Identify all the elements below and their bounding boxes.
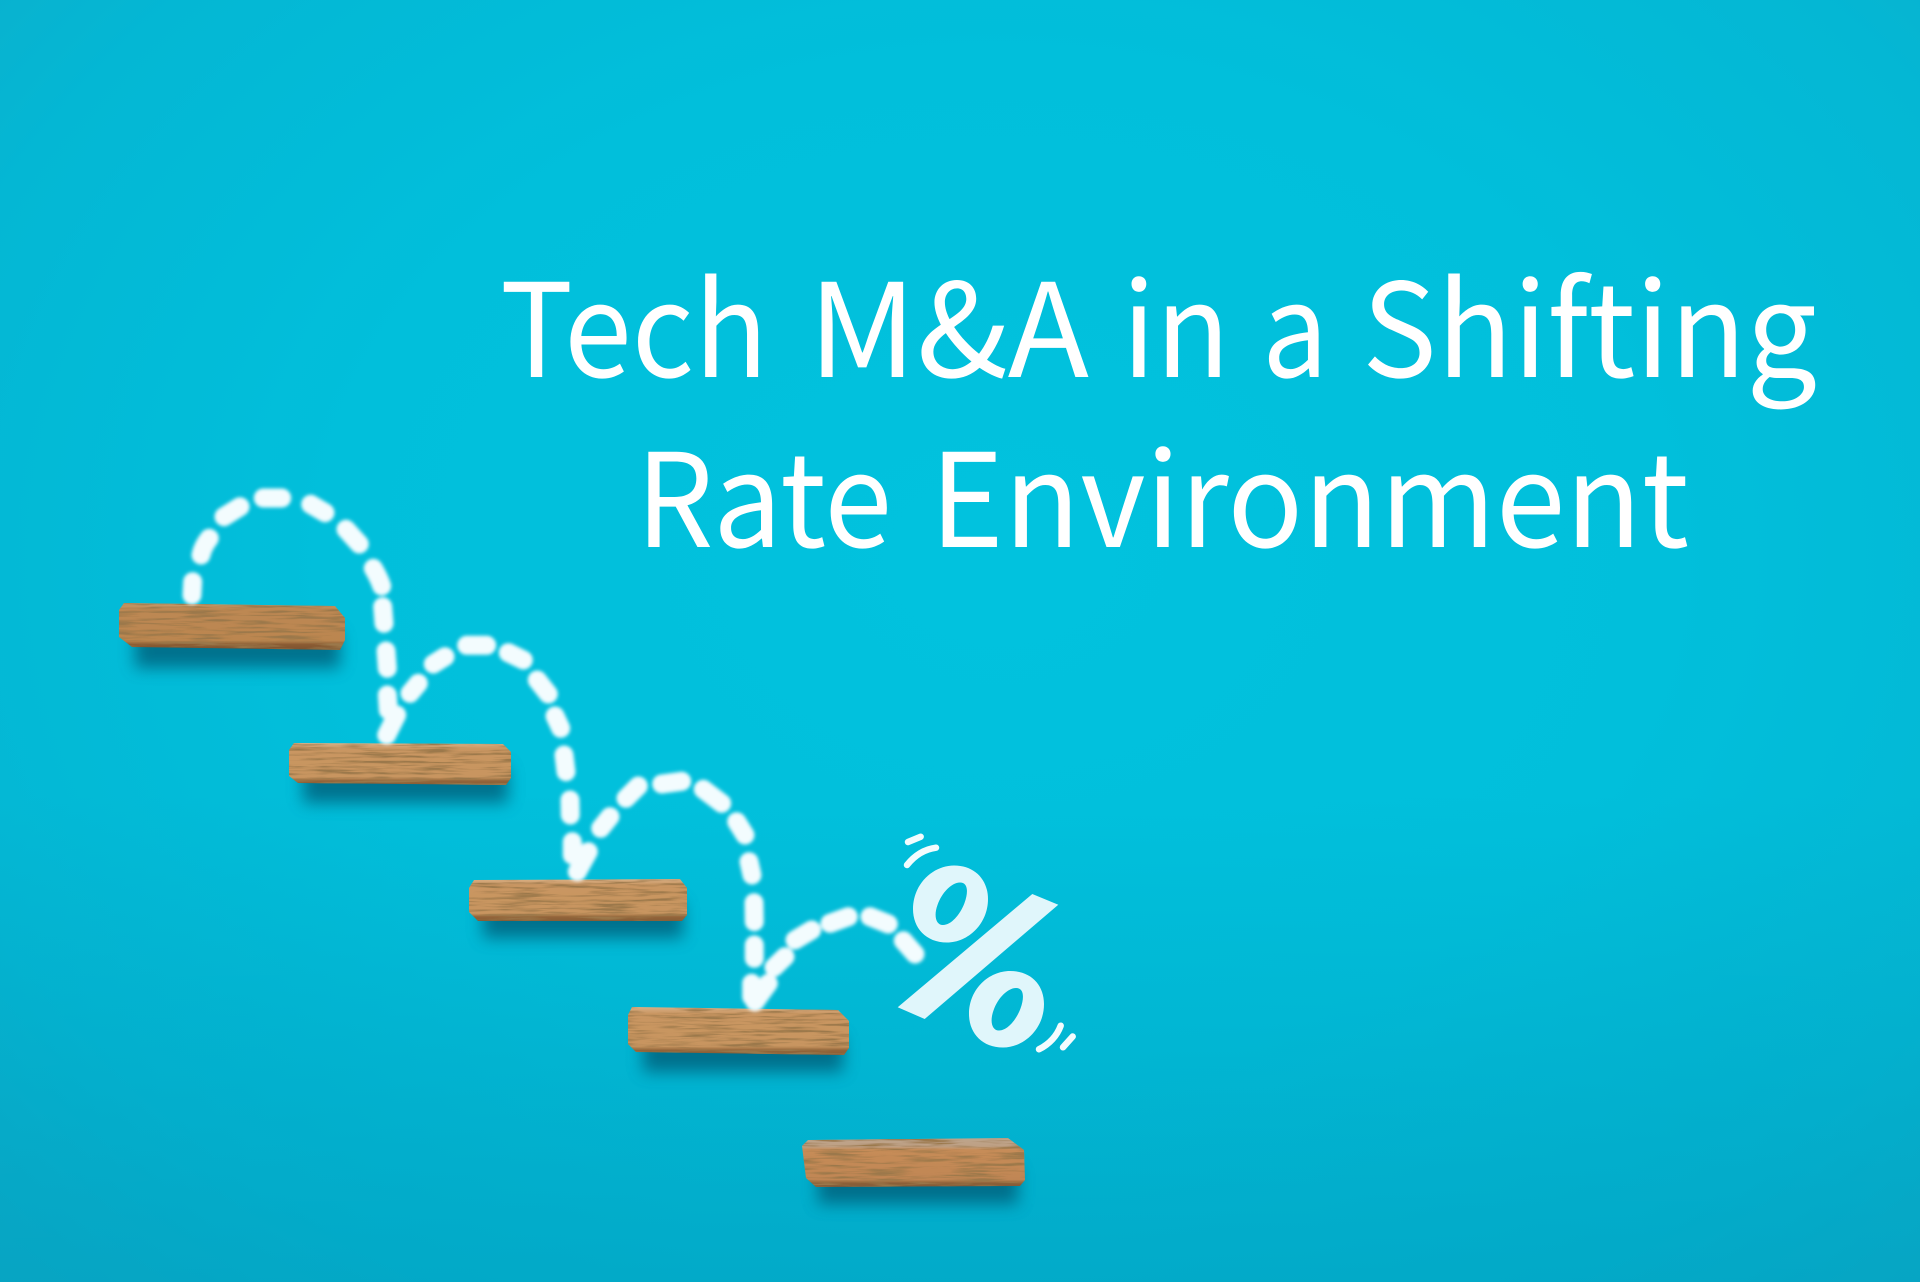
- title: Environment: [930, 397, 1689, 585]
- wooden step 5: [802, 1138, 1025, 1204]
- title: Tech: [500, 227, 768, 415]
- title: M&A: [808, 227, 1089, 415]
- icon: percent sign: [898, 866, 1058, 1048]
- motion lines around percent: [907, 837, 1073, 1049]
- wooden step 2: [289, 743, 511, 803]
- title: Rate: [636, 397, 892, 585]
- wooden step 4: [628, 1007, 849, 1072]
- wooden step 1: [119, 603, 345, 668]
- dashed bounce trail: [192, 498, 915, 1002]
- title: in: [1122, 227, 1230, 415]
- wooden step 3: [469, 879, 687, 938]
- title: a: [1262, 227, 1328, 415]
- title: Shifting: [1362, 227, 1817, 415]
